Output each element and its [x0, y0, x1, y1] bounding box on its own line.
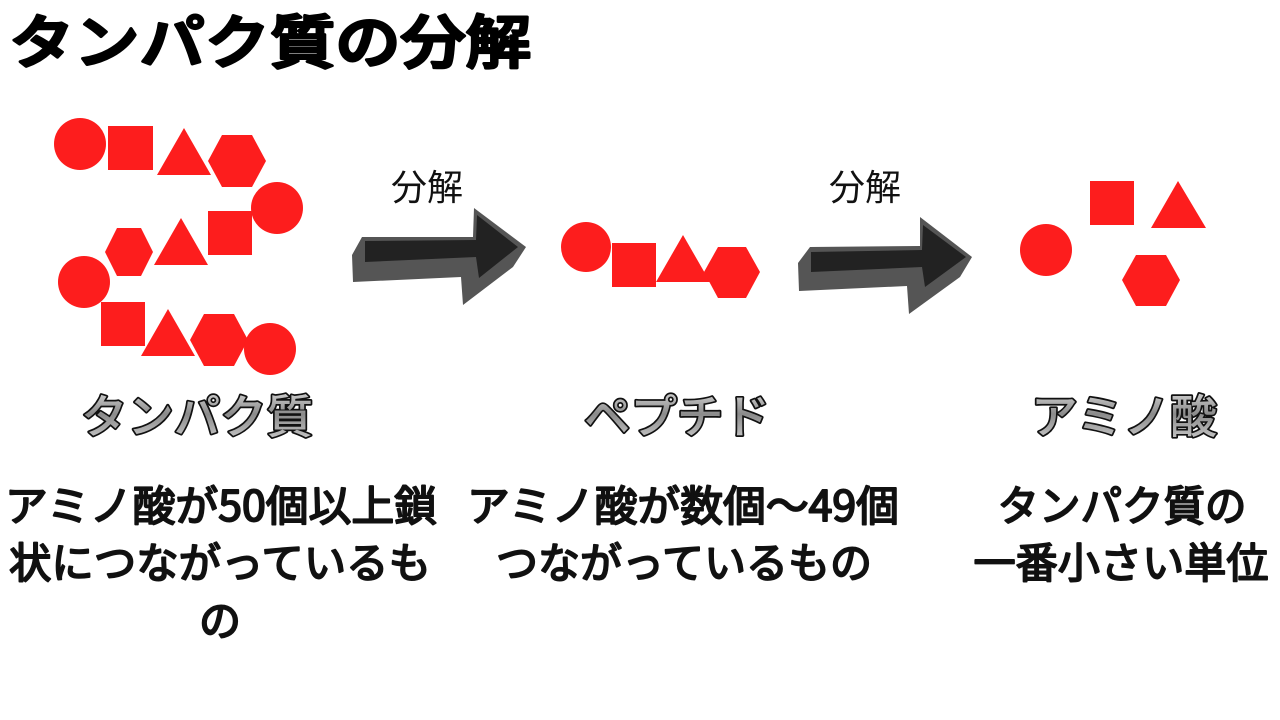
- label: protein: タンパク質: [81, 381, 313, 447]
- label: amino acid: アミノ酸: [1031, 381, 1217, 447]
- text: protein description: の: [199, 588, 241, 649]
- text: peptide description: アミノ酸が数個〜49個: [467, 473, 899, 534]
- diagram: protein chain: [54, 118, 303, 375]
- text: amino acid description: タンパク質の: [998, 473, 1246, 534]
- diagram: peptide chain: [561, 222, 760, 298]
- text: peptide description: [467, 473, 899, 591]
- text: peptide description: つながっているもの: [496, 530, 872, 591]
- text: protein description: [5, 473, 437, 649]
- text: protein description: アミノ酸が50個以上鎖: [5, 473, 437, 534]
- arrow: peptide to amino acid: [798, 217, 972, 314]
- arrow label: decomposition 2: 分解: [829, 159, 901, 211]
- arrow: protein to peptide: [352, 208, 526, 305]
- diagram: separate amino acids: [1020, 181, 1206, 306]
- text: amino acid description: [974, 473, 1268, 591]
- text: amino acid description: 一番小さい単位: [974, 530, 1268, 591]
- label: peptide: ペプチド: [584, 381, 770, 447]
- text: protein description: 状につながっているも: [9, 530, 431, 591]
- arrow label: decomposition 1: 分解: [391, 159, 463, 211]
